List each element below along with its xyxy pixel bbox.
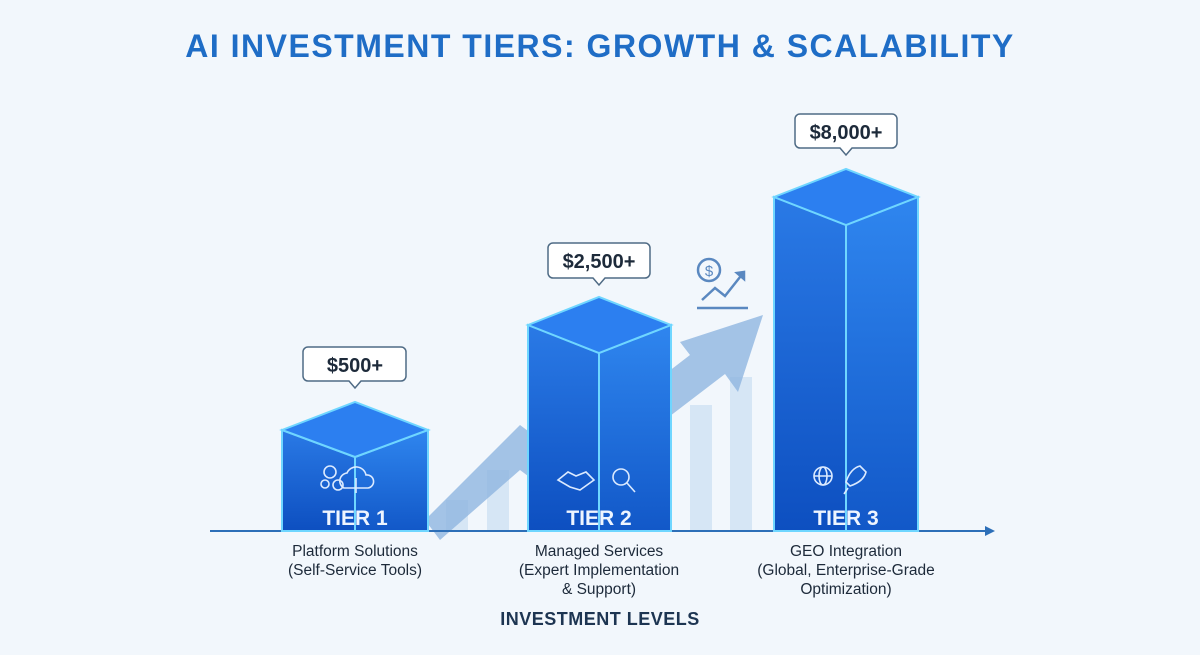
icon: growth chart: $ (705, 263, 714, 280)
label: tier 2: & Support) (562, 581, 636, 598)
label: tier 1: (Self-Service Tools) (288, 562, 422, 579)
icons tier 2 (558, 469, 635, 492)
label: tier 3: Optimization) (800, 581, 892, 598)
label: tier 2: (Expert Implementation (519, 562, 679, 579)
label: tier 1 (288, 543, 422, 579)
bubble: $500+: $500+ (327, 355, 383, 377)
growth arrow (425, 315, 763, 540)
bubble: $8,000+ (795, 114, 897, 155)
label: tier 1: Platform Solutions (292, 543, 418, 560)
tier 1 block (282, 402, 428, 531)
icons tier 3 (814, 466, 866, 494)
axis (210, 526, 995, 536)
icon: growth chart (697, 259, 748, 308)
tier labels: TIER 2 (566, 507, 632, 530)
title: AI INVESTMENT TIERS: GROWTH & SCALABILITY (185, 28, 1015, 64)
bubble: $500+ (303, 347, 406, 388)
bubble: $8,000+: $8,000+ (810, 122, 882, 144)
tier labels: TIER 1 (322, 507, 388, 530)
label: tier 3: GEO Integration (790, 543, 902, 560)
tier 2 block (528, 297, 671, 531)
label: tier 3 (757, 543, 935, 598)
bubble: $2,500+ (548, 243, 650, 285)
tier labels: TIER 3 (813, 507, 879, 530)
icons tier 1 (321, 466, 374, 493)
axis title: INVESTMENT LEVELS (500, 609, 700, 629)
background bars (446, 377, 752, 531)
label: tier 3: (Global, Enterprise-Grade (757, 562, 935, 579)
label: tier 2: Managed Services (535, 543, 663, 560)
label: tier 2 (519, 543, 679, 598)
tier labels (322, 507, 879, 530)
bubble: $2,500+: $2,500+ (563, 251, 635, 273)
tier 3 block (774, 169, 918, 531)
